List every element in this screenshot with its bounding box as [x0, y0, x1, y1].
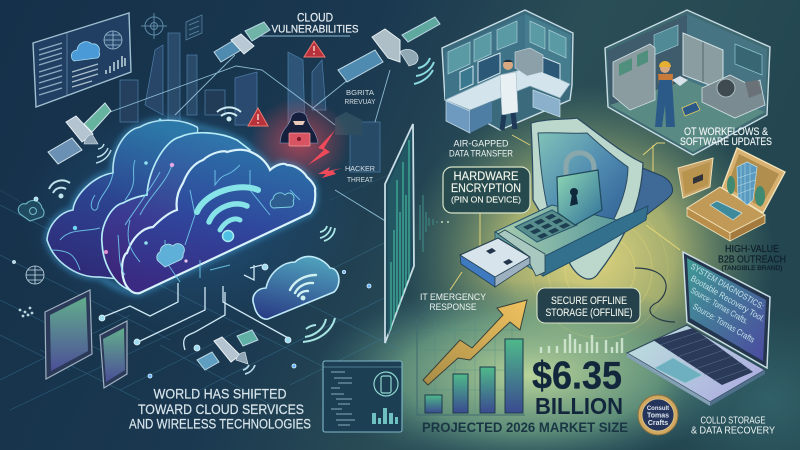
label: data recovery	[344, 88, 376, 106]
OT tag	[682, 102, 700, 116]
icon: wifi top center	[217, 107, 241, 120]
cloud back layer	[47, 120, 198, 280]
icon: wifi above small cloud	[320, 226, 335, 241]
waveform right of panel	[420, 195, 449, 252]
monitors	[478, 53, 500, 83]
icon: globe	[26, 266, 44, 284]
label: air-gapped	[449, 138, 513, 160]
lab room	[442, 10, 573, 133]
satellite top center	[214, 22, 270, 62]
icon: wifi left	[49, 180, 70, 198]
icon: warning triangle lower	[248, 108, 268, 126]
screen text	[689, 261, 767, 345]
label: OT workflows: OT WORKFLOWS &	[684, 126, 769, 138]
growth bar chart	[417, 318, 525, 415]
label: hacker threat	[345, 164, 376, 184]
laptop base	[627, 325, 765, 402]
label: air-gapped: AIR-GAPPED	[454, 138, 509, 150]
small list panel	[186, 15, 202, 40]
satellite left	[48, 103, 111, 164]
stat: market value: $6.35	[532, 354, 622, 398]
node dots	[73, 118, 188, 263]
icon: cloud in monitor	[71, 42, 100, 61]
padlock	[557, 153, 602, 225]
desk	[445, 67, 570, 110]
label: data recovery: RREVUAY	[344, 97, 376, 106]
small cloud icon left	[18, 200, 44, 221]
circuit traces	[50, 160, 300, 282]
label: high-value B2B: B2B OUTREACH	[718, 254, 786, 266]
icon: scattered nodes	[19, 307, 33, 317]
label: hacker threat: HACKER	[345, 164, 376, 173]
USB back cap	[622, 167, 673, 220]
label: air-gapped: DATA TRANSFER	[449, 148, 513, 160]
network links top	[110, 36, 400, 230]
machine	[702, 75, 765, 118]
smartphone	[100, 321, 127, 388]
label: cold storage: & DATA RECOVERY	[691, 424, 775, 436]
stat: market value	[532, 354, 623, 419]
growth arrow	[423, 300, 527, 385]
laptop cable	[635, 268, 675, 322]
label: hacker threat: THREAT	[347, 175, 373, 184]
callout: hardware encryption: (PIN ON DEVICE)	[451, 194, 521, 204]
satellite top right	[338, 17, 440, 84]
icon: outline cloud right	[270, 193, 294, 208]
icon: small cloud in cloud	[157, 244, 184, 267]
label: it emergency	[420, 292, 487, 313]
USB connector plug	[460, 230, 545, 287]
label: high-value B2B: HIGH-VALUE	[725, 244, 779, 255]
callout: hardware encryption: ENCRYPTION	[451, 183, 521, 195]
screen text: Bootable Recovery Tool.	[689, 273, 767, 324]
icon: warning triangle upper	[304, 41, 325, 57]
callout: secure offline storage: STORAGE (OFFLINE)	[546, 307, 632, 319]
title: world has shifted: AND WIRELESS TECHNOLOGIES	[129, 416, 311, 432]
network grid	[0, 170, 400, 415]
satellite bottom	[197, 330, 258, 374]
building	[737, 162, 757, 205]
screen text: Source: Tomas Crafts.	[689, 285, 750, 326]
icon: wifi in cloud	[197, 187, 258, 242]
trackpad	[655, 358, 702, 383]
label: cloud vulnerabilities: VULNERABILITIES	[272, 24, 358, 36]
icon: globe in monitor	[104, 31, 122, 49]
consult badge: Consult	[647, 406, 669, 412]
title: world has shifted: TOWARD CLOUD SERVICES	[138, 401, 304, 417]
cabinets	[683, 33, 723, 90]
screen text: SYSTEM DIAGNOSTICS:	[689, 261, 766, 311]
callout: secure offline storage: SECURE OFFLINE	[551, 295, 627, 307]
stat: market value: BILLION	[535, 393, 623, 419]
screen text: Source: Tomas Crafts	[691, 301, 757, 345]
callout: secure offline storage	[537, 288, 640, 323]
label: OT workflows	[680, 126, 772, 148]
icon: usb ring	[374, 372, 398, 396]
label: it emergency: RESPONSE	[430, 302, 476, 313]
label: cloud vulnerabilities: CLOUD	[297, 12, 333, 24]
icon: lightning bolts	[308, 130, 342, 178]
callout: hardware encryption: HARDWARE	[454, 171, 519, 183]
OT workshop room	[605, 10, 770, 155]
label: projected market size: PROJECTED 2026 MARKET SIZE	[422, 419, 628, 435]
secondary cloud with wifi	[253, 256, 339, 319]
label: high-value B2B	[718, 244, 786, 272]
line nodes	[12, 197, 371, 378]
label: high-value B2B: (TANGIBLE BRAND)	[722, 266, 782, 272]
mini bars	[372, 408, 398, 424]
tablet	[45, 290, 92, 379]
consult badge	[638, 395, 678, 435]
scientist	[500, 60, 518, 130]
connector lines right	[450, 135, 680, 338]
cloud middle layer	[102, 133, 250, 290]
consult badge: Tomas	[647, 412, 669, 420]
label: cold storage	[691, 414, 775, 436]
label: data recovery: BGRITA	[346, 88, 374, 97]
keypad	[515, 210, 577, 242]
icon: target gear	[141, 13, 167, 39]
main cloud	[47, 118, 315, 293]
firewall panel	[385, 124, 414, 343]
cloud front layer	[122, 150, 315, 293]
code panel	[323, 361, 402, 432]
dashboard monitor panel	[33, 13, 131, 107]
consult badge: Crafts	[648, 420, 668, 427]
keyboard	[653, 328, 753, 385]
wall panels	[448, 21, 566, 74]
USB body	[495, 205, 648, 276]
device in case	[710, 201, 742, 220]
title: world has shifted: WORLD HAS SHIFTED	[154, 386, 286, 402]
laptop	[627, 252, 770, 406]
worker	[655, 61, 688, 127]
title: world has shifted	[129, 386, 311, 432]
icon: wifi right of small cloud	[303, 318, 335, 342]
callout: hardware encryption	[443, 167, 530, 213]
folder icon	[678, 158, 713, 198]
briefcase with building	[687, 148, 785, 241]
circuit lines to devices	[103, 265, 290, 350]
mini spark bars	[541, 334, 622, 353]
cityscape	[120, 33, 380, 172]
label: OT workflows: SOFTWARE UPDATES	[680, 136, 772, 148]
icon: hacker with laptop	[280, 112, 318, 146]
label: it emergency: IT EMERGENCY	[420, 292, 487, 303]
shield	[531, 118, 643, 279]
red glow	[250, 98, 350, 186]
label: cold storage: COLLD STORAGE	[700, 414, 766, 426]
label: cloud vulnerabilities	[272, 12, 358, 36]
